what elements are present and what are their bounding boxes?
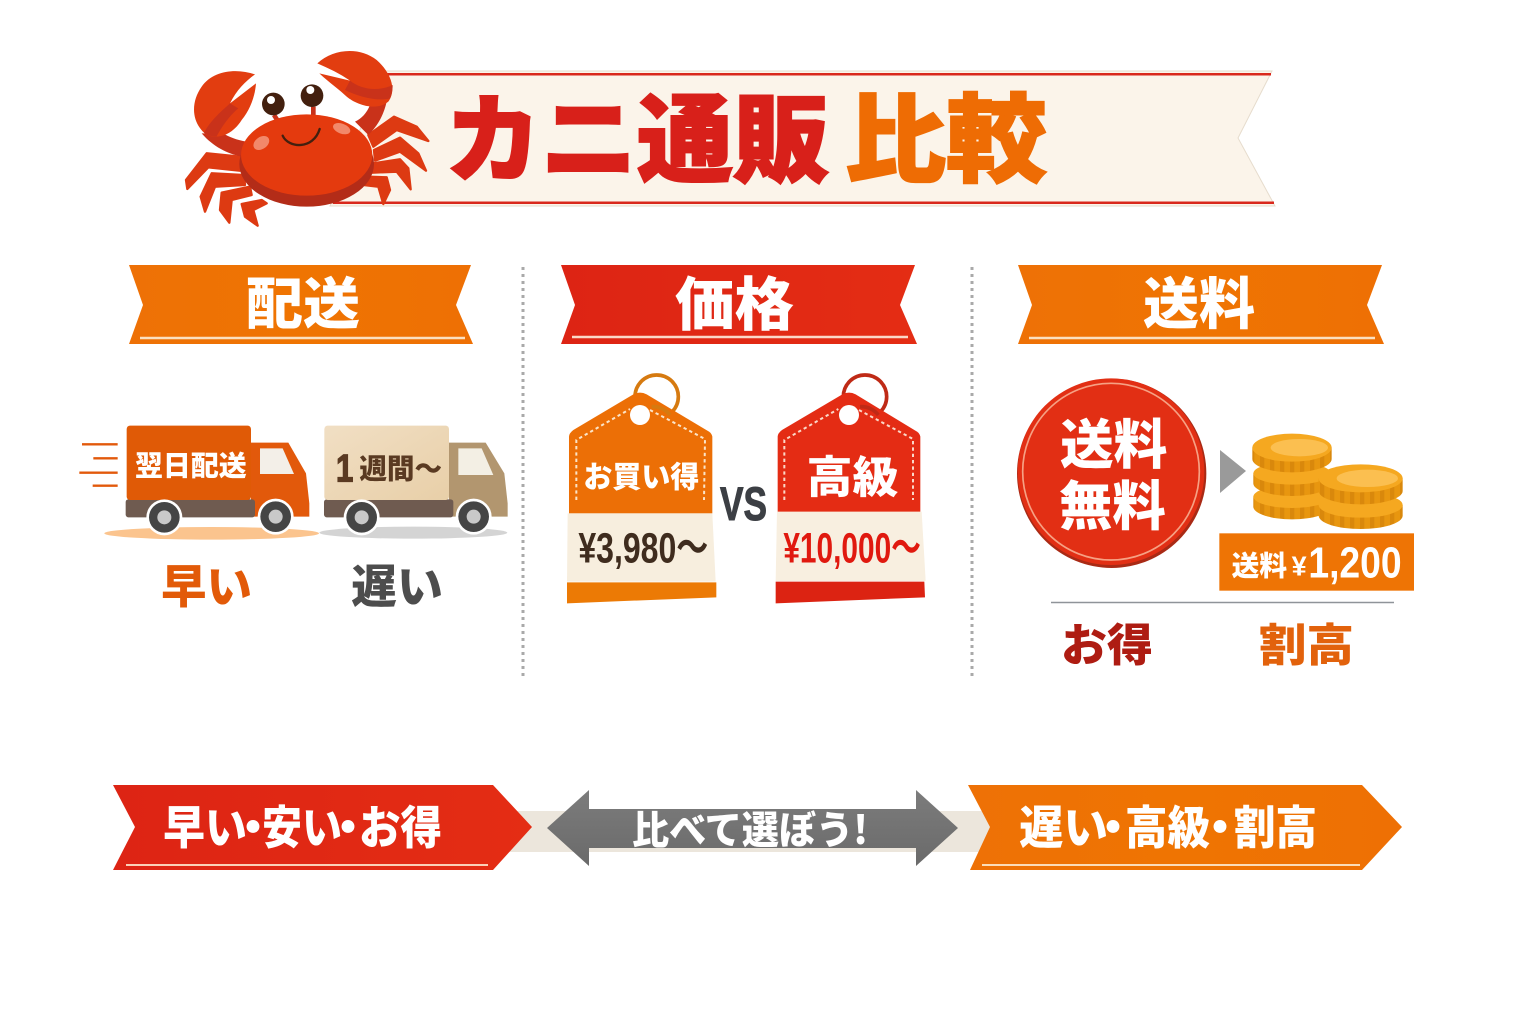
arrow: grey — [1220, 450, 1246, 493]
icon: fast orange truck: 翌日配送 — [135, 444, 247, 484]
icon: slow tan truck: 週間〜 — [359, 448, 442, 488]
badge: free shipping: 送料 — [1060, 403, 1167, 480]
divider line — [1051, 602, 1394, 604]
arrow banner: red — [113, 785, 532, 870]
price tag: premium: ¥10,000〜 — [783, 524, 921, 572]
label: pricey: 割高 — [1259, 609, 1354, 674]
label: fast: 早い — [161, 551, 252, 617]
arrow banner: red: ・ — [325, 792, 371, 858]
price box: shipping fee: 送料 — [1232, 545, 1287, 585]
arrow banner: orange: 高級 — [1125, 792, 1210, 858]
arrow banner: orange: 割高 — [1234, 792, 1317, 858]
heading: delivery — [129, 260, 473, 344]
price box: shipping fee: 1,200 — [1308, 539, 1402, 587]
price tag: premium — [776, 375, 926, 603]
column divider right — [970, 267, 974, 680]
heading: price — [561, 258, 917, 344]
panel: price — [561, 258, 926, 603]
bottom comparison band — [113, 785, 1402, 870]
icon: fast orange truck — [79, 426, 319, 540]
price tag: bargain: ¥3,980〜 — [578, 524, 708, 572]
price box: shipping fee — [1219, 533, 1414, 591]
arrow banner: red: 早い — [163, 792, 247, 858]
arrow banner: orange: ・ — [1090, 792, 1136, 858]
title text: カニ通販 — [445, 63, 829, 202]
arrow banner: orange: 遅い — [1019, 792, 1108, 858]
title banner ribbon — [330, 71, 1275, 206]
panel: shipping — [1017, 260, 1414, 674]
price tag: bargain: お買い得 — [583, 453, 699, 497]
column divider left — [522, 267, 524, 680]
icon: slow tan truck: 1 — [336, 446, 353, 490]
price tag: bargain — [567, 375, 716, 603]
badge: free shipping — [1017, 378, 1206, 568]
label: slow: 遅い — [351, 551, 443, 617]
badge: free shipping: 無料 — [1059, 464, 1166, 541]
double arrow: grey — [547, 790, 958, 866]
price tag: premium: 高級 — [807, 441, 898, 505]
title text — [445, 63, 1047, 202]
arrow banner: red: 安い — [262, 792, 342, 858]
arrow banner: red: ・ — [230, 792, 276, 858]
arrow banner: orange — [968, 785, 1402, 870]
double arrow: grey: 比べて選ぼう! — [632, 800, 868, 856]
heading: shipping: 送料 — [1143, 260, 1255, 341]
panel: delivery — [79, 260, 508, 617]
icon: crab mascot — [186, 51, 428, 226]
connector bar — [500, 811, 990, 852]
arrow banner: orange: ・ — [1197, 792, 1243, 858]
icon: coin stacks — [1252, 434, 1403, 529]
label: VS: VS — [720, 477, 767, 530]
icon: slow tan truck — [319, 426, 508, 539]
heading: price: 価格 — [675, 258, 794, 342]
label: good value: お得 — [1061, 609, 1153, 674]
title text: 比較 — [845, 63, 1047, 202]
heading: delivery: 配送 — [246, 260, 360, 341]
arrow banner: red: お得 — [359, 792, 442, 858]
price box: shipping fee: ¥ — [1292, 551, 1307, 582]
heading: shipping — [1018, 260, 1384, 344]
